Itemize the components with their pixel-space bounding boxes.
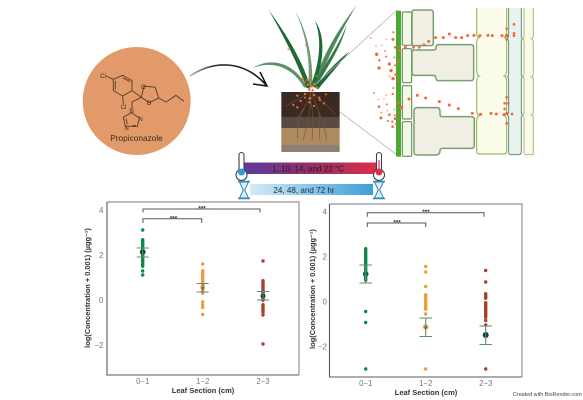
significance brackets (143, 209, 260, 223)
y axis tick labels: 2 (323, 252, 328, 262)
series 1-2 (200, 262, 205, 316)
panel: leaf cell cross-section (370, 8, 533, 157)
chemical structure (106, 75, 184, 127)
chart: right scatter plot (308, 204, 522, 397)
x axis tick labels: 1−2 (196, 377, 209, 386)
x axis title: Leaf Section (cm) (172, 386, 235, 395)
molecule atom labels: N (129, 109, 134, 115)
y axis tick labels: −2 (94, 341, 104, 350)
molecule atom labels: O (147, 101, 152, 107)
roots (285, 92, 335, 140)
y axis tick labels: 2 (99, 251, 104, 260)
significance stars: *** (198, 206, 206, 212)
icon: cold thermometer (236, 152, 247, 180)
y axis title: log(Concentration + 0.001) (µgg⁻¹) (83, 228, 92, 348)
icon: hot thermometer (373, 152, 384, 180)
error bars 0-1 (137, 248, 149, 257)
decorative dotted marks on top bracket (156, 208, 238, 210)
significance stars (393, 209, 430, 226)
molecule atom labels: Cl (121, 105, 126, 111)
y axis tick labels: 4 (99, 206, 104, 215)
soil block (281, 92, 340, 152)
y axis tick labels (318, 208, 328, 352)
chart: left scatter plot (83, 202, 299, 395)
error bars 2-3 (257, 292, 269, 300)
pesticide dots moving through leaf (370, 23, 515, 128)
icon: right hourglass (373, 182, 385, 198)
vascular tissue columns (477, 8, 507, 154)
error bars 0-1 (360, 265, 372, 283)
credit text: Created with BioRender.com (513, 392, 582, 398)
significance stars (170, 206, 206, 222)
x axis tick labels: 0−1 (359, 379, 372, 388)
arrow: molecule to plant (190, 65, 267, 86)
large mesophyll cells (412, 10, 474, 155)
plot frame (330, 204, 522, 377)
significance brackets (367, 213, 484, 227)
plot frame (107, 202, 299, 375)
x axis title: Leaf Section (cm) (395, 388, 458, 397)
significance stars: *** (393, 220, 401, 226)
temperature label: 1, 10, 14, and 22 °C (272, 164, 344, 173)
x axis tick labels: 2−3 (479, 379, 492, 388)
significance stars: *** (422, 209, 430, 216)
panel: propiconazole molecule (83, 47, 191, 155)
y axis tick labels: 0 (99, 296, 104, 305)
series 0-1 (363, 247, 369, 371)
duration label: 24, 48, and 72 hr (273, 186, 335, 195)
molecule atom labels (100, 74, 152, 132)
molecule name: Propiconazole (110, 133, 163, 143)
x axis tick labels (359, 379, 492, 388)
small epidermal cells (402, 12, 412, 156)
y axis tick labels: 4 (323, 208, 328, 216)
error bars 1-2 (197, 284, 209, 292)
y axis tick labels: 0 (323, 298, 328, 306)
molecule atom labels: N (138, 117, 143, 123)
pesticide dots on plant and soil (287, 44, 327, 108)
x axis tick labels: 2−3 (256, 377, 270, 386)
y axis tick labels (94, 206, 104, 350)
error bars 1-2 (420, 318, 432, 336)
error bars 2-3 (480, 326, 492, 344)
icon: left hourglass (238, 182, 250, 198)
series 1-2 (423, 265, 428, 371)
series 0-1 (140, 228, 146, 277)
leaf epidermis (396, 11, 401, 157)
molecule atom labels: N (124, 126, 129, 132)
panel: plant in soil (252, 5, 357, 152)
x axis tick labels: 0−1 (136, 377, 149, 386)
plant leaves (252, 5, 357, 89)
significance stars: *** (170, 216, 178, 222)
molecule atom labels: Cl (100, 74, 106, 80)
temperature bar (243, 162, 378, 174)
y axis tick labels: −2 (318, 342, 328, 352)
molecule atom labels: O (141, 85, 146, 91)
series 2-3 (483, 269, 489, 371)
x axis tick labels (136, 377, 270, 386)
molecule background circle (83, 47, 191, 155)
duration bar (250, 184, 373, 195)
x axis tick labels: 1−2 (419, 379, 432, 388)
y axis title: log(Concentration + 0.001) (µgg⁻¹) (308, 229, 317, 349)
zoom lines to leaf cross-section (316, 10, 397, 155)
series 2-3 (260, 259, 266, 346)
